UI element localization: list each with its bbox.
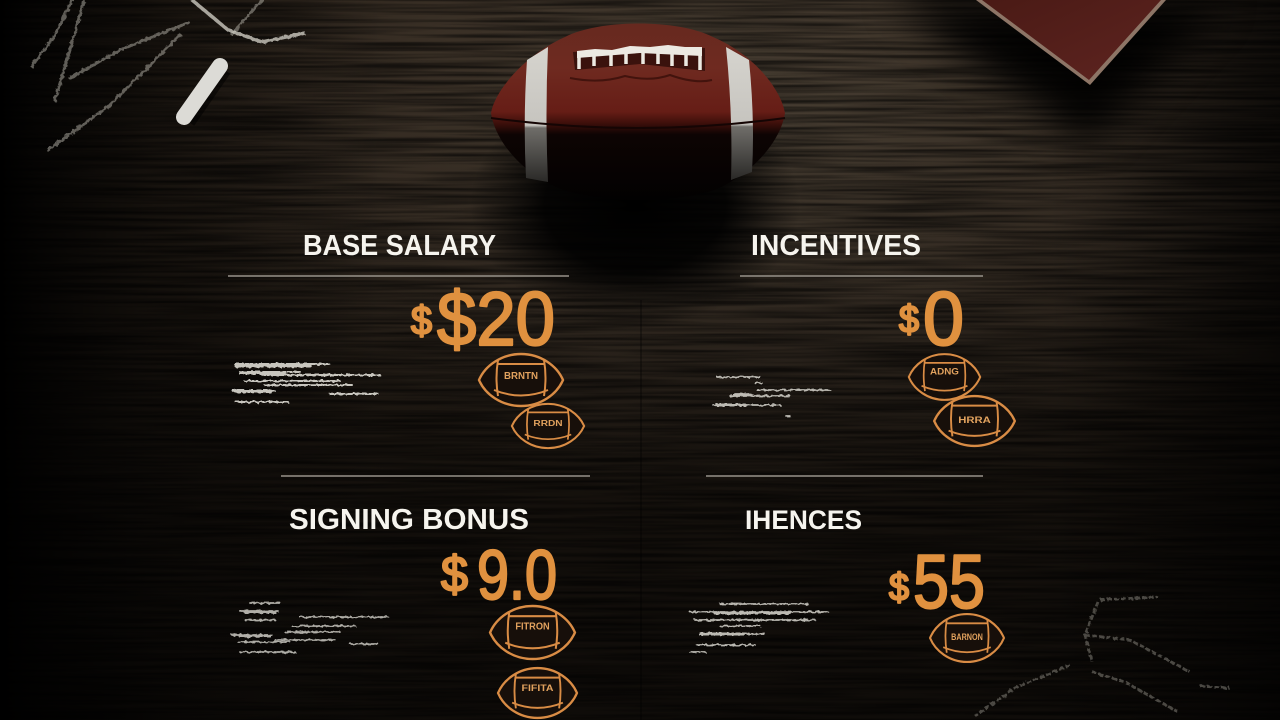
- value: $55: $: [889, 567, 909, 609]
- value: $55: 55: [913, 540, 985, 625]
- panel: incentives: [713, 230, 1015, 446]
- icon: football badge: [490, 606, 575, 659]
- icon: football badge: [934, 396, 1015, 446]
- value: $55: [889, 540, 985, 625]
- icon: football badge: FITRON: [515, 621, 550, 632]
- icon: football badge: HRRA: [958, 415, 991, 426]
- icon: football badge: ADNG: [930, 366, 959, 376]
- heading: base salary: BASE SALARY: [303, 230, 496, 262]
- laces: [570, 45, 712, 81]
- chalk drawing bottom right: [975, 597, 1230, 716]
- icon: football badge: [479, 354, 563, 406]
- icon: football badge: FIFITA: [522, 683, 554, 694]
- value: $9.0: 9.0: [477, 536, 557, 614]
- chalk scribble: [233, 364, 380, 402]
- leather pad in top right corner: [890, 0, 1225, 145]
- shadow under football: [470, 85, 800, 325]
- icon: football badge: BARNON: [951, 632, 983, 642]
- value: $0: [899, 277, 964, 362]
- value: $20: $20: [437, 277, 555, 362]
- chalk stick: [184, 66, 222, 120]
- icon: football badge: RRDN: [533, 418, 563, 428]
- chalk scribble: [690, 604, 828, 652]
- value: $20: $: [411, 299, 432, 343]
- icon: football badge: [498, 668, 577, 718]
- value: $0: 0: [923, 277, 964, 362]
- heading: incentives: INCENTIVES: [751, 230, 921, 262]
- heading: signing bonus: SIGNING BONUS: [289, 504, 529, 536]
- ball seam: [491, 118, 785, 128]
- panel: base salary: [228, 230, 584, 448]
- left stripe: [525, 47, 548, 182]
- icon: football badge: [909, 354, 980, 400]
- icon: football badge: [930, 614, 1004, 662]
- value: $0: $: [899, 299, 919, 341]
- value: $9.0: $: [441, 546, 468, 602]
- football: [491, 24, 785, 200]
- chalk drawing top left: [32, 0, 305, 150]
- chalk scribble: [713, 377, 830, 416]
- icon: football badge: BRNTN: [504, 371, 538, 382]
- chalk scribble: [232, 603, 388, 652]
- right stripe: [726, 47, 753, 180]
- panel: signing bonus: [232, 476, 590, 718]
- panel: lower right category: [690, 476, 1004, 662]
- icon: football badge: [512, 404, 584, 448]
- value: $9.0: [441, 536, 557, 614]
- heading: lower right category: IHENCES: [745, 505, 862, 535]
